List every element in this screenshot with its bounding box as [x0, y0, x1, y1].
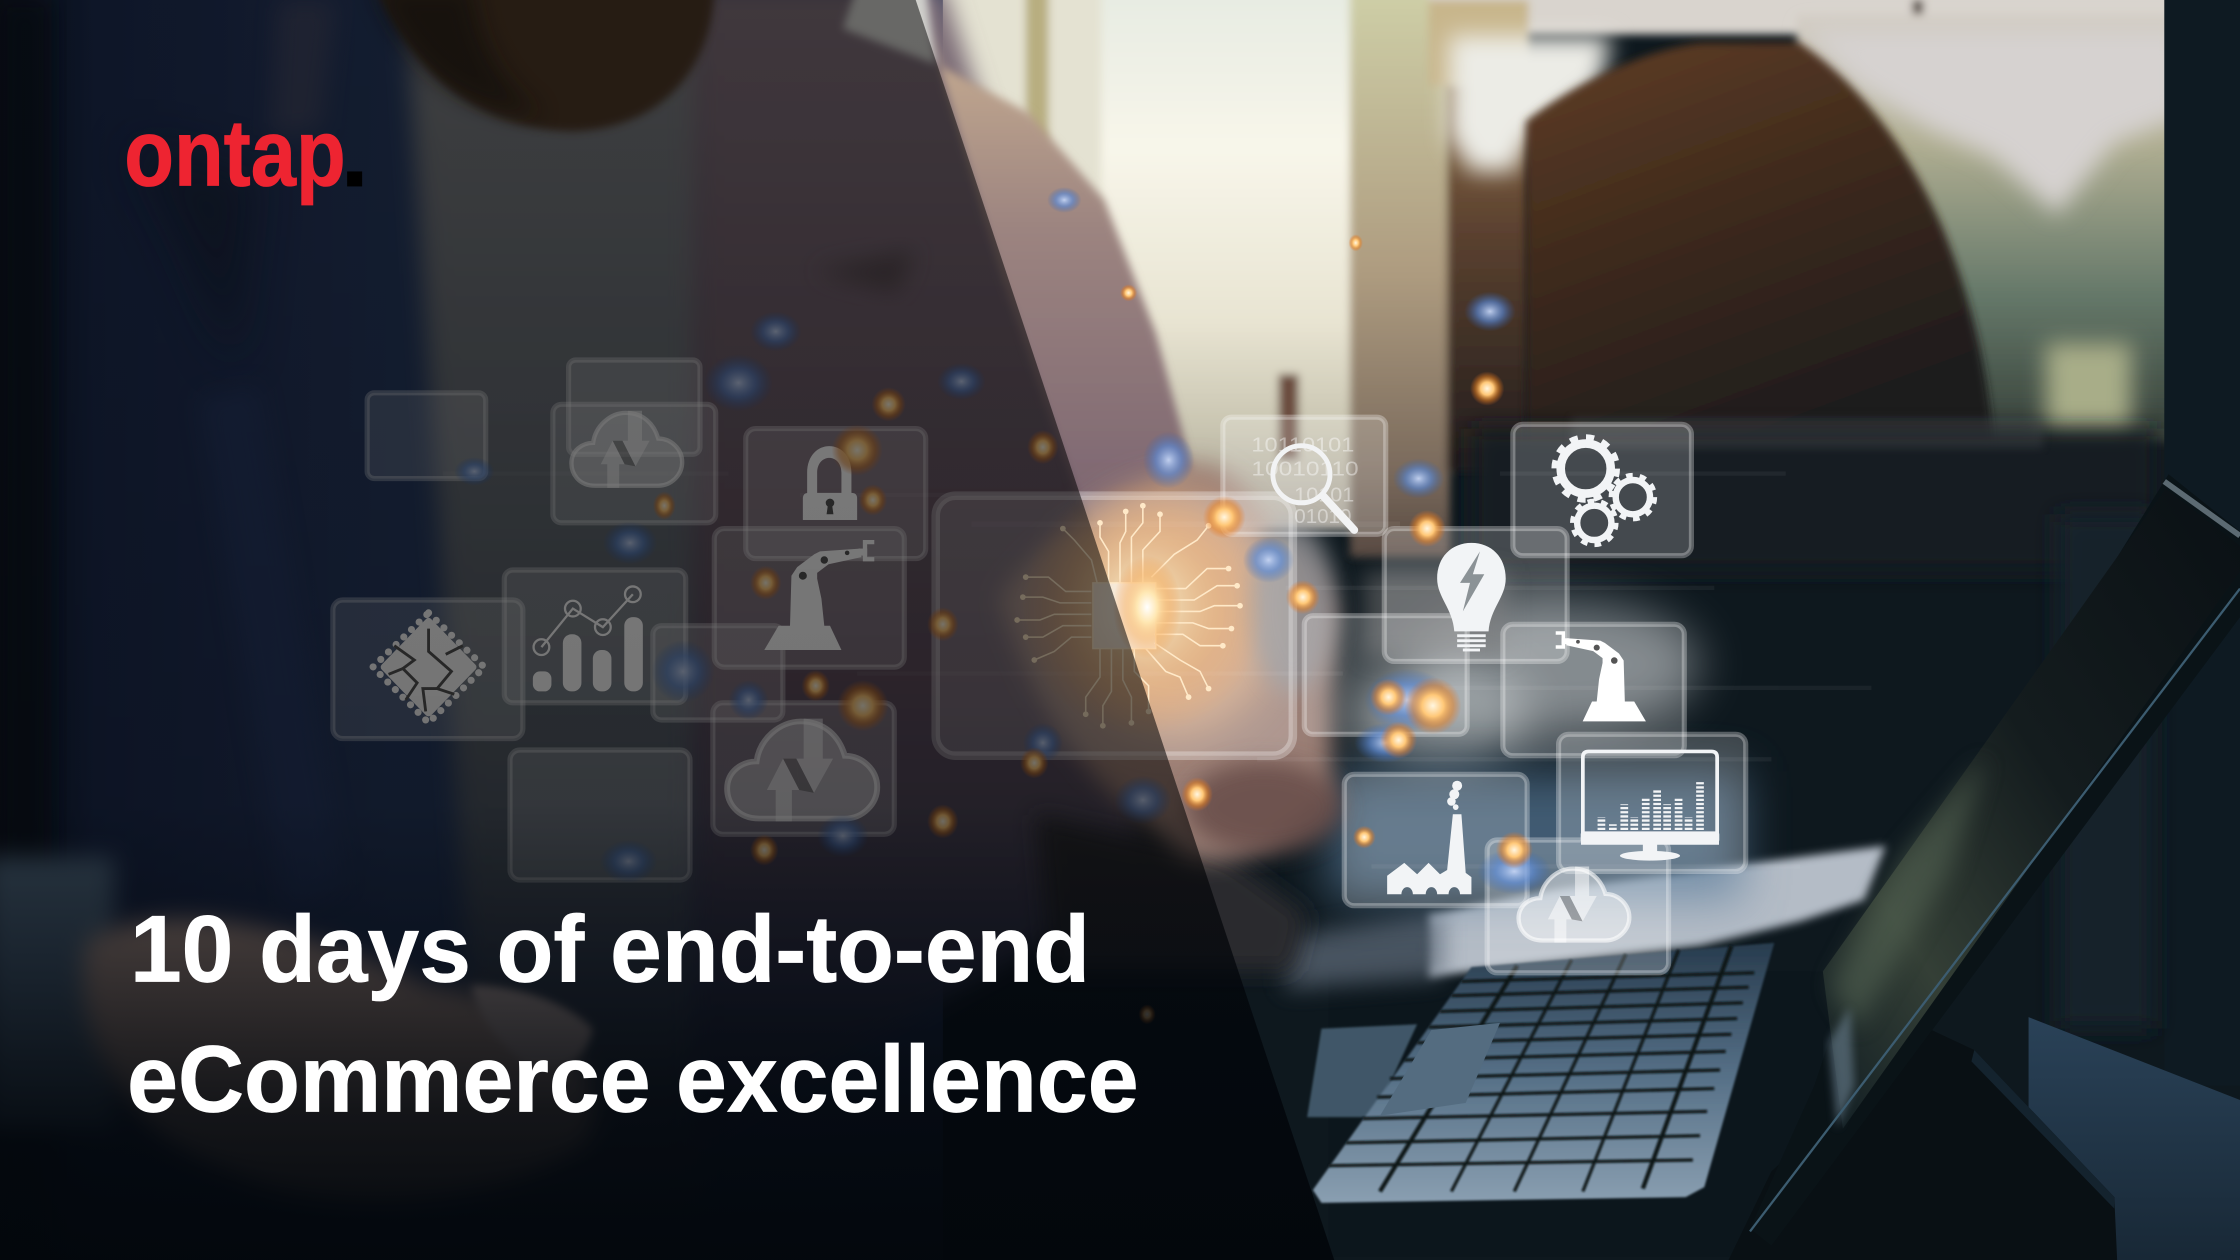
small blank card: [653, 626, 783, 720]
icon: cloud transfer: [571, 411, 682, 488]
icon: light bulb: [1437, 543, 1506, 651]
icon: binary and magnifier: 10110101: [1251, 434, 1354, 456]
title: 10 days of end-to-end: [130, 896, 1090, 1001]
cloud card lower: [713, 703, 894, 834]
screen: [1823, 489, 2240, 1129]
left: jacket: [0, 0, 943, 1260]
circuit card: [333, 600, 523, 739]
icon: padlock: [803, 446, 857, 520]
blank card: [367, 393, 486, 479]
lock card: [746, 429, 926, 559]
gear card: [1513, 424, 1691, 556]
right hand fist: [1000, 464, 1336, 861]
icon: binary and magnifier: [1251, 434, 1359, 530]
logo: ontap: [124, 101, 346, 206]
left sleeve cuff and hand: [0, 857, 114, 1129]
blank card lower: [510, 750, 690, 880]
cloud card: [553, 404, 716, 523]
title: eCommerce excellence: [127, 1026, 1139, 1131]
cloud card right: [1487, 840, 1669, 973]
lapel: [693, 0, 1143, 1143]
icon: factory: [1387, 781, 1471, 894]
garment sleeve: [929, 29, 1193, 531]
blank card top: [569, 360, 700, 454]
dark lower background: [1329, 971, 1829, 1257]
hologram cards: [333, 187, 1871, 1024]
dark arch wall: [1526, 43, 1993, 471]
faint horizontal streaks: [443, 471, 1871, 869]
chart card: [504, 570, 686, 703]
cuff of the hand: [1036, 814, 1307, 971]
shirt: [407, 29, 714, 1260]
neck: [374, 0, 714, 131]
table: [2029, 1017, 2240, 1260]
big chip card: [936, 496, 1293, 756]
window and columns: [914, 0, 2211, 557]
pale blurred leaves: [1449, 29, 2186, 436]
icon: binary and magnifier: 01010: [1294, 506, 1351, 528]
binary card: [1223, 417, 1386, 534]
dark diagonal overlay: [0, 0, 1334, 1260]
icon: robot arm: [764, 540, 874, 650]
robot card right: [1503, 624, 1684, 756]
icon: monitor chart: [1581, 751, 1719, 861]
icon: line and bar chart: [533, 586, 643, 691]
bokeh lights: [454, 187, 1551, 1024]
icon: cloud transfer right: [1519, 866, 1629, 943]
factory card: [1344, 774, 1527, 906]
desk reflection band: [1429, 846, 1886, 977]
space bar: [1380, 1023, 1500, 1116]
icon: cloud transfer lower: [727, 719, 877, 821]
pale blurred objects behind hand: [1414, 599, 1700, 730]
right edge wall: [2164, 0, 2240, 1086]
stand: [1729, 1029, 2117, 1260]
blank card right: [1304, 616, 1467, 734]
icon: binary and magnifier: 10010110: [1251, 459, 1359, 481]
icon: binary and magnifier: 10101: [1294, 484, 1354, 506]
laptop keyboard: [1307, 943, 1774, 1203]
bulb card: [1384, 529, 1567, 661]
monitor card: [1559, 734, 1746, 871]
side desk pad: [1307, 1024, 1417, 1117]
tablet on a stand: [1729, 474, 2240, 1260]
icon: gears: [1556, 439, 1654, 544]
bezel: [1750, 474, 2240, 1246]
icon: robot arm right: [1556, 631, 1646, 721]
icon: circuit diamond: [373, 613, 484, 723]
title: [127, 896, 1139, 1131]
big chip circuit: [1014, 479, 1266, 736]
robot card: [714, 529, 904, 667]
